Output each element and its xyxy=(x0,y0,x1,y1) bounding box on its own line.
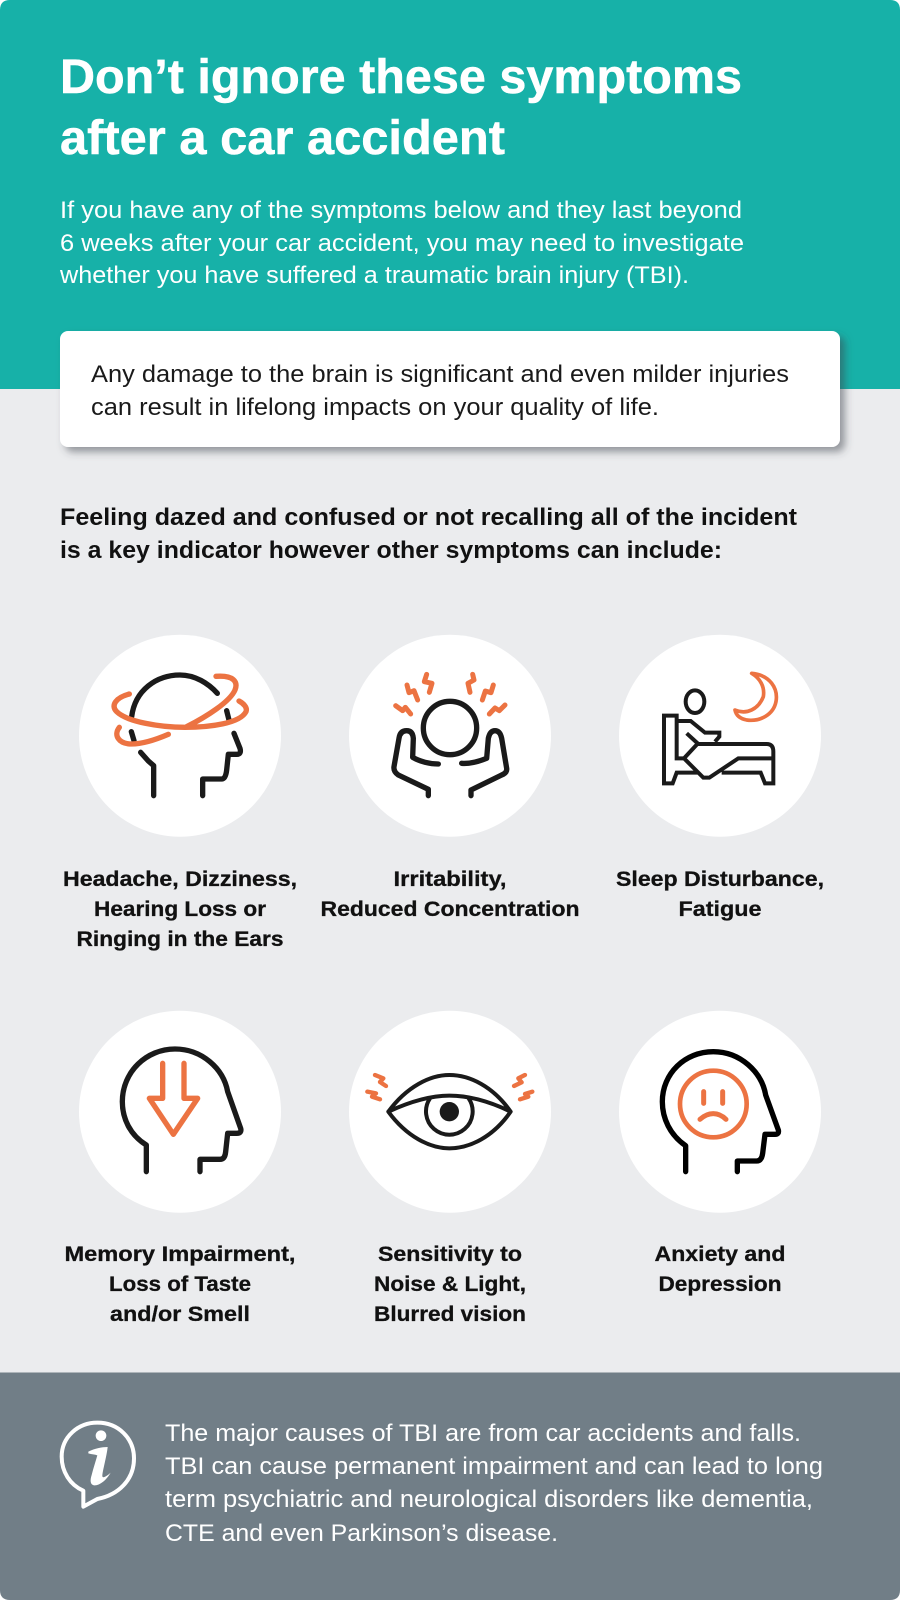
label: Irritability, xyxy=(394,867,506,891)
label xyxy=(63,867,297,951)
symptom: sensitivity xyxy=(349,1011,551,1326)
label: Ringing in the Ears xyxy=(76,927,284,951)
label: Memory Impairment, xyxy=(64,1242,296,1266)
label: Fatigue xyxy=(678,897,762,921)
label: and/or Smell xyxy=(110,1302,250,1326)
panel: footer xyxy=(0,1372,900,1600)
footer text xyxy=(165,1420,823,1547)
label: Reduced Concentration xyxy=(320,897,580,921)
footer text: The major causes of TBI are from car accidents and falls. xyxy=(165,1420,801,1447)
subheading: Feeling dazed and confused or not recalling all of the incident xyxy=(60,504,797,531)
panel: teal header xyxy=(0,0,900,389)
footer text: term psychiatric and neurological disorders like dementia, xyxy=(165,1486,813,1513)
label: Anxiety and xyxy=(654,1242,786,1266)
icon: person in bed with moon xyxy=(619,635,821,837)
label: Noise & Light, xyxy=(374,1272,526,1296)
callout card: can result in lifelong impacts on your quality of life. xyxy=(91,394,659,421)
subheading xyxy=(60,504,797,564)
footer text: CTE and even Parkinson’s disease. xyxy=(165,1520,558,1547)
icon: eye with bolts xyxy=(349,1011,551,1213)
callout card: Any damage to the brain is significant and even milder injuries xyxy=(91,361,789,388)
intro text: If you have any of the symptoms below and they last beyond xyxy=(60,197,742,224)
label: Loss of Taste xyxy=(109,1272,251,1296)
icon: head with down arrow xyxy=(79,1011,281,1213)
label: Blurred vision xyxy=(374,1302,526,1326)
intro text: 6 weeks after your car accident, you may need to investigate xyxy=(60,230,744,257)
label: Sleep Disturbance, xyxy=(616,867,824,891)
intro text xyxy=(59,197,744,289)
icon: head with sad face xyxy=(619,1011,821,1213)
icon: info speech bubble xyxy=(62,1423,134,1507)
label xyxy=(374,1242,526,1326)
subheading: is a key indicator however other symptoms can include: xyxy=(60,537,722,564)
title xyxy=(60,51,742,165)
symptom: headache xyxy=(63,635,297,951)
label: Sensitivity to xyxy=(378,1242,522,1266)
label xyxy=(654,1242,786,1296)
symptom: irritability xyxy=(320,635,580,921)
label: Depression xyxy=(658,1272,782,1296)
label xyxy=(320,867,580,921)
symptom: sleep disturbance xyxy=(616,635,824,921)
callout card xyxy=(60,331,840,447)
label xyxy=(616,867,824,921)
label: Headache, Dizziness, xyxy=(63,867,297,891)
label: Hearing Loss or xyxy=(94,897,267,921)
symptom: anxiety xyxy=(619,1011,821,1296)
icon: head with dizzy rings xyxy=(79,635,281,837)
title: after a car accident xyxy=(60,112,505,165)
footer text: TBI can cause permanent impairment and can lead to long xyxy=(165,1453,823,1480)
title: Don’t ignore these symptoms xyxy=(60,51,742,104)
symptom: memory impairment xyxy=(64,1011,296,1326)
icon: head in hands with bolts xyxy=(349,635,551,837)
label xyxy=(64,1242,296,1326)
intro text: whether you have suffered a traumatic brain injury (TBI). xyxy=(59,262,689,289)
